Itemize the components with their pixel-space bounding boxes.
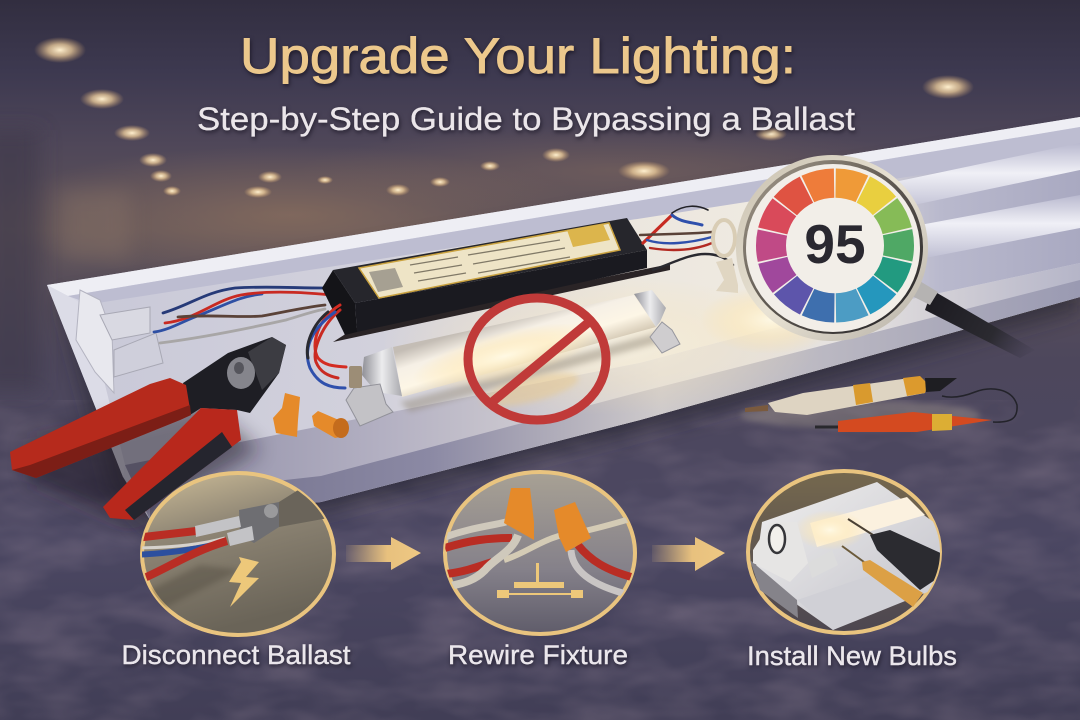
ballast label — [359, 223, 620, 298]
wire connectors on fixture — [273, 393, 349, 438]
yellow screwdriver — [842, 546, 864, 562]
title: Upgrade Your Lighting: — [240, 28, 796, 84]
wire connector left — [504, 488, 534, 540]
warm glow on fixture — [380, 275, 820, 415]
magnifying glass with colour rendering wheel — [700, 155, 1035, 358]
lamp bracket — [713, 220, 738, 293]
fluorescent fixture housing — [47, 117, 1080, 530]
wires from ballast to tube — [307, 305, 346, 388]
ballast box — [322, 218, 670, 342]
colour wheel — [745, 158, 925, 333]
prohibition sign — [468, 298, 606, 420]
wire connector right — [554, 502, 591, 552]
step 2 circle: rewire fixture — [445, 472, 640, 634]
arrow 1 — [346, 537, 421, 570]
right lamp holder — [650, 322, 680, 353]
cutting pliers — [10, 337, 286, 525]
lightning icon — [229, 557, 259, 607]
step 1 label: Disconnect Ballast — [122, 640, 351, 670]
step 3 circle: install new bulbs — [748, 471, 950, 633]
wires from ballast to lamp bracket — [640, 206, 733, 270]
mounted tubes at right — [880, 143, 1080, 258]
switch diagram icon — [497, 563, 583, 598]
red test probe — [815, 389, 1017, 432]
glowing fluorescent tube — [346, 290, 680, 426]
step 2 label: Rewire Fixture — [448, 640, 628, 670]
left metal end cap — [362, 347, 402, 396]
voltage tester pen — [740, 376, 980, 429]
right metal end cap — [634, 290, 666, 327]
left lamp holder — [346, 384, 393, 426]
step 3 label: Install New Bulbs — [747, 641, 957, 671]
left end socket — [76, 290, 163, 393]
wire terminals — [349, 366, 362, 388]
CRI value: 95 — [804, 213, 866, 275]
wires from left socket to ballast — [154, 287, 340, 343]
black tester — [848, 519, 873, 535]
step 1 circle: disconnect ballast — [130, 470, 345, 635]
subtitle: Step-by-Step Guide to Bypassing a Ballast — [197, 101, 855, 137]
arrow 2 — [652, 537, 725, 571]
